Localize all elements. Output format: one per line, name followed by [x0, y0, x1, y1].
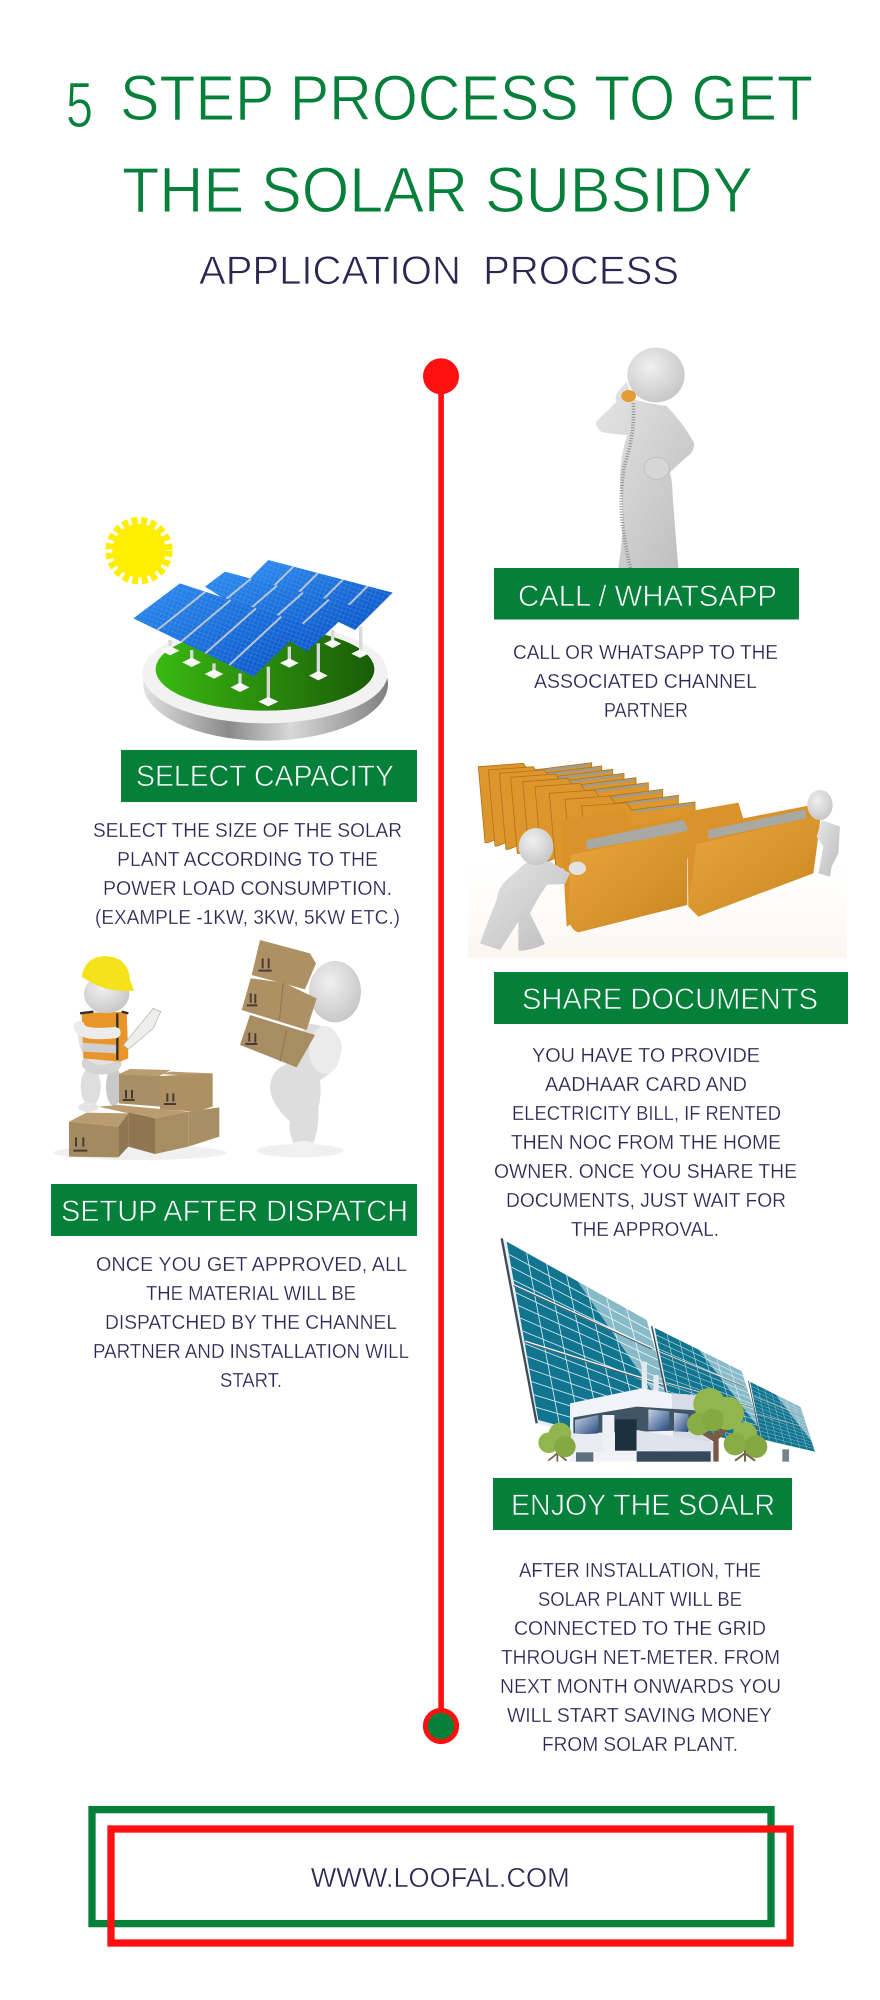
text: enjoy description: NEXT MONTH ONWARDS YOU [500, 1675, 781, 1698]
timeline end dot [425, 1710, 457, 1742]
hand on hip [644, 457, 669, 479]
text: select description [93, 819, 402, 929]
text: share description: THEN NOC FROM THE HOME [511, 1131, 781, 1154]
text: share description: OWNER. ONCE YOU SHARE THE [494, 1160, 797, 1183]
text: enjoy description [500, 1559, 781, 1756]
banner: enjoy the soalr: ENJOY THE SOALR [511, 1489, 775, 1522]
title line one: STEP PROCESS TO GET [120, 62, 813, 134]
back solar panels [250, 560, 393, 630]
banner: select capacity [121, 750, 417, 802]
text: share description: THE APPROVAL. [571, 1218, 719, 1241]
text: enjoy description: WILL START SAVING MONEY [507, 1704, 772, 1727]
carried boxes [240, 940, 317, 1067]
green frame [92, 1810, 771, 1924]
icon: man on phone [596, 348, 694, 568]
text: enjoy description: CONNECTED TO THE GRID [514, 1617, 766, 1640]
left figure [480, 828, 586, 951]
icon: solar array on disc with sun [110, 521, 393, 741]
clipboard [123, 1008, 161, 1049]
text: enjoy description: AFTER INSTALLATION, THE [519, 1559, 761, 1582]
text: enjoy description: FROM SOLAR PLANT. [542, 1733, 738, 1756]
right front folder [687, 803, 821, 917]
title line two: THE SOLAR SUBSIDY [122, 154, 753, 226]
subtitle: APPLICATION PROCESS [199, 249, 679, 293]
text: select description: PLANT ACCORDING TO THE [117, 848, 378, 871]
right tree [724, 1422, 767, 1462]
text: setup description [93, 1253, 409, 1392]
sun [110, 521, 168, 580]
banner: setup after dispatch [51, 1184, 417, 1236]
phone handset [621, 390, 636, 402]
left front folder [561, 808, 720, 932]
text: share description: DOCUMENTS, JUST WAIT FOR [506, 1189, 786, 1212]
stacked boxes [69, 1069, 219, 1157]
door [615, 1419, 637, 1451]
text: share description: ELECTRICITY BILL, IF RENTED [512, 1102, 781, 1125]
disc base [142, 623, 388, 741]
inspector worker [78, 956, 161, 1112]
banner: select capacity: SELECT CAPACITY [136, 760, 394, 793]
icon: folders being pushed [468, 763, 847, 958]
icon: solar farm and building [502, 1238, 815, 1462]
text: setup description: THE MATERIAL WILL BE [146, 1282, 356, 1305]
timeline start dot [423, 358, 459, 394]
title line one: 5 [66, 69, 93, 141]
text: share description [494, 1044, 797, 1241]
text: call description: ASSOCIATED CHANNEL [534, 670, 757, 693]
text: call description: CALL OR WHATSAPP TO THE [513, 641, 778, 664]
text: setup description: PARTNER AND INSTALLATION WILL [93, 1340, 409, 1363]
title [66, 62, 813, 226]
text: call description [513, 641, 778, 722]
text: share description: YOU HAVE TO PROVIDE [532, 1044, 760, 1067]
safety vest [82, 1012, 128, 1062]
text: select description: SELECT THE SIZE OF THE SOLAR [93, 819, 402, 842]
text: setup description: START. [220, 1369, 282, 1392]
banner: enjoy the soalr [493, 1478, 792, 1530]
text: call description: PARTNER [604, 699, 688, 722]
banner: share documents [494, 972, 848, 1024]
text: select description: POWER LOAD CONSUMPTION. [103, 877, 392, 900]
left tree [538, 1423, 576, 1462]
timeline [423, 358, 459, 1742]
panel pole [782, 1449, 789, 1462]
text: enjoy description: SOLAR PLANT WILL BE [538, 1588, 742, 1611]
text: enjoy description: THROUGH NET-METER. FROM [501, 1646, 780, 1669]
icon: workers with boxes [53, 940, 361, 1160]
footer: website box [92, 1810, 790, 1943]
hard hat [82, 956, 134, 991]
middle solar panel [652, 1326, 766, 1448]
banner: share documents: SHARE DOCUMENTS [522, 983, 818, 1016]
phone cord [621, 403, 634, 568]
red frame [111, 1829, 790, 1943]
banner: setup after dispatch: SETUP AFTER DISPATCH [61, 1195, 408, 1228]
large solar panel [502, 1238, 687, 1460]
carrier figure [270, 961, 361, 1151]
front solar panels [133, 583, 307, 677]
floor shadows [53, 1144, 343, 1160]
banner: call / whatsapp [494, 568, 799, 620]
large tree [687, 1388, 744, 1462]
banner: call / whatsapp: CALL / WHATSAPP [518, 580, 777, 613]
small solar panel [748, 1381, 815, 1452]
posts and feet [161, 627, 369, 706]
website url: WWW.LOOFAL.COM [311, 1862, 570, 1893]
back folders [478, 763, 695, 882]
text: select description: (EXAMPLE -1KW, 3KW, 5KW ETC.) [95, 906, 400, 929]
text: share description: AADHAAR CARD AND [545, 1073, 747, 1096]
right figure [807, 790, 840, 877]
building [570, 1362, 713, 1462]
text: setup description: DISPATCHED BY THE CHANNEL [105, 1311, 397, 1334]
text: setup description: ONCE YOU GET APPROVED, ALL [96, 1253, 407, 1276]
middle solar panels [205, 572, 355, 652]
